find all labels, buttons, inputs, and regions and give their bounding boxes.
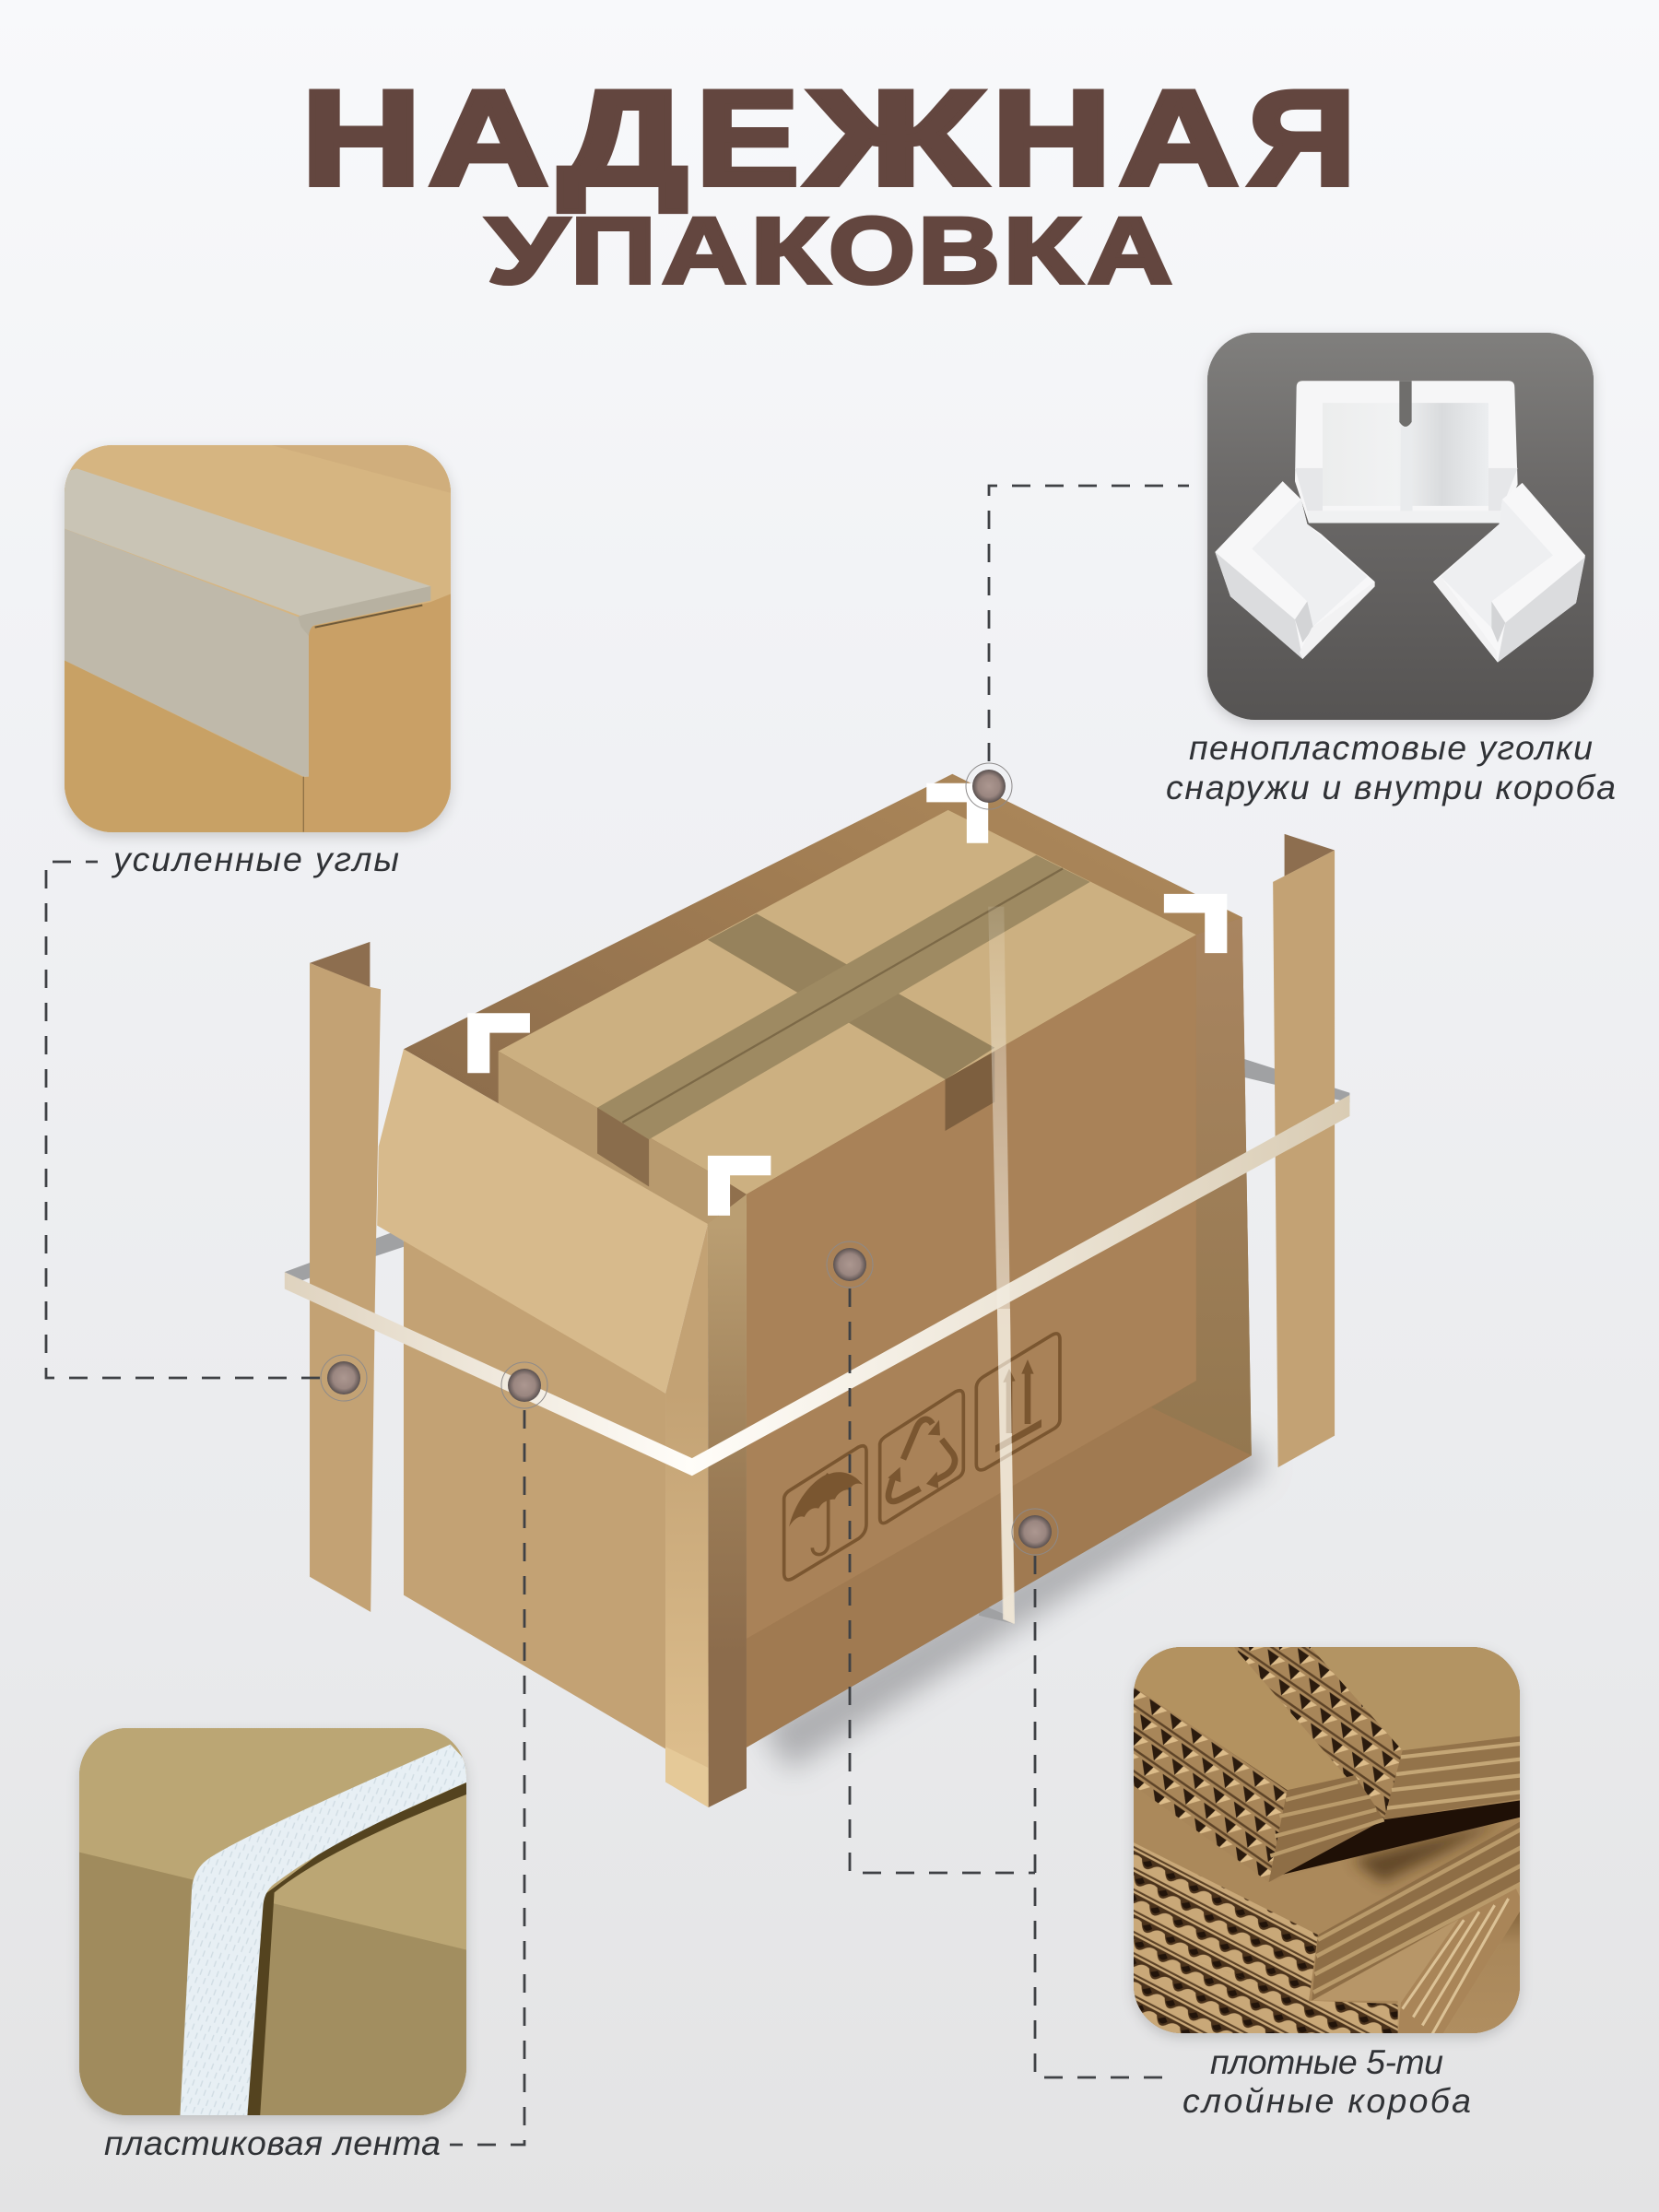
callout leader lines (46, 486, 1189, 2145)
icon: recycling (880, 1391, 963, 1524)
inner box front side (499, 1052, 721, 1231)
open box back flaps (404, 774, 1242, 1224)
soft shadow on sheet (1352, 1819, 1505, 1882)
corrugated band bottom (1131, 1938, 1398, 2037)
vertical strap overlay on icon (997, 1309, 1014, 1624)
panel: foam corners photo (1207, 333, 1594, 720)
back strap segments (285, 1059, 1349, 1624)
title: Е (696, 63, 799, 213)
corrugated band left (1131, 1685, 1288, 1882)
right sheet corner (1443, 1912, 1520, 2033)
inner box top (499, 810, 1196, 1194)
cross tape (708, 913, 994, 1079)
white corner: front (708, 1156, 771, 1216)
foam centre piece (1295, 381, 1518, 523)
caption: corrugated cardboard: плотные 5-ти (1210, 2042, 1443, 2081)
title: Ж (806, 63, 986, 213)
title: В (918, 198, 1000, 303)
sheets (1131, 1645, 1355, 1790)
title: А (1119, 63, 1239, 213)
corner pillar (665, 1194, 747, 1807)
panel: box illustration (285, 774, 1349, 1807)
markers (321, 763, 1058, 1555)
marker: box wall lower (1012, 1509, 1058, 1555)
icons: handling pictograms (784, 1334, 1060, 1580)
sheet edge front (1312, 1819, 1524, 2001)
title: Я (1248, 63, 1356, 213)
white strap (180, 1745, 471, 2117)
panel: corrugated cardboard photo (1131, 1645, 1524, 2037)
side face base (747, 917, 1252, 1747)
title: Н (301, 63, 421, 213)
box ground shadow (760, 1436, 1265, 1771)
cross tape side drop (946, 1052, 994, 1131)
corrugated band front (1131, 1841, 1318, 2001)
white corner: back (926, 783, 988, 843)
title: Д (559, 63, 688, 213)
left box face (404, 1231, 665, 1748)
sheet edge rear (1384, 1735, 1524, 1819)
icon: this way up (976, 1334, 1060, 1470)
icon: umbrella (784, 1446, 866, 1580)
marker: box wall upper (827, 1241, 873, 1288)
white corner: left (467, 1013, 530, 1073)
left corner guard (310, 942, 381, 1612)
caption: reinforced corners: усиленные углы (111, 840, 399, 878)
foam right piece (1433, 483, 1585, 663)
marker: reinforced corners (321, 1355, 367, 1401)
title (301, 63, 1356, 303)
title: К (1003, 198, 1082, 303)
caption: foam corners: снаружи и внутри короба (1166, 768, 1616, 806)
cardboard angle guard (55, 468, 430, 777)
title: О (829, 198, 915, 303)
caption: foam corners: пенопластовые уголки (1189, 728, 1593, 767)
marker: foam corners (966, 763, 1012, 809)
right corner guard (1273, 834, 1335, 1467)
plastic strap vertical (988, 907, 1015, 1624)
title: Н (992, 63, 1112, 213)
marker: plastic strap (501, 1362, 547, 1408)
foam left piece (1215, 481, 1375, 659)
strap shadow (246, 1781, 471, 2117)
title: А (429, 63, 548, 213)
sheet edge left (1269, 1775, 1384, 1882)
panel: plastic strap photo (75, 1724, 471, 2120)
title: А (662, 198, 747, 303)
panel: reinforced corners photo (55, 436, 461, 841)
title: К (750, 198, 830, 303)
right box flap (1151, 917, 1252, 1455)
title: А (1088, 198, 1172, 303)
dark gap (1278, 1800, 1524, 1876)
plastic strap horizontal (285, 1095, 1349, 1476)
caption: corrugated cardboard: слойные короба (1182, 2081, 1471, 2120)
bottom sheet (1312, 1882, 1524, 2037)
caption: plastic strap: пластиковая лента (104, 2124, 441, 2162)
white corner: right (1164, 894, 1227, 953)
lower right face (747, 1407, 1252, 1747)
fan of sheet edges (1398, 1886, 1524, 2037)
open front flap (377, 1049, 708, 1394)
title: У (487, 198, 570, 303)
right box face (747, 935, 1196, 1639)
title: П (571, 198, 656, 303)
long tape (597, 855, 1090, 1186)
corrugated band rear (1232, 1645, 1403, 1819)
middle sheet (1131, 1783, 1524, 1935)
